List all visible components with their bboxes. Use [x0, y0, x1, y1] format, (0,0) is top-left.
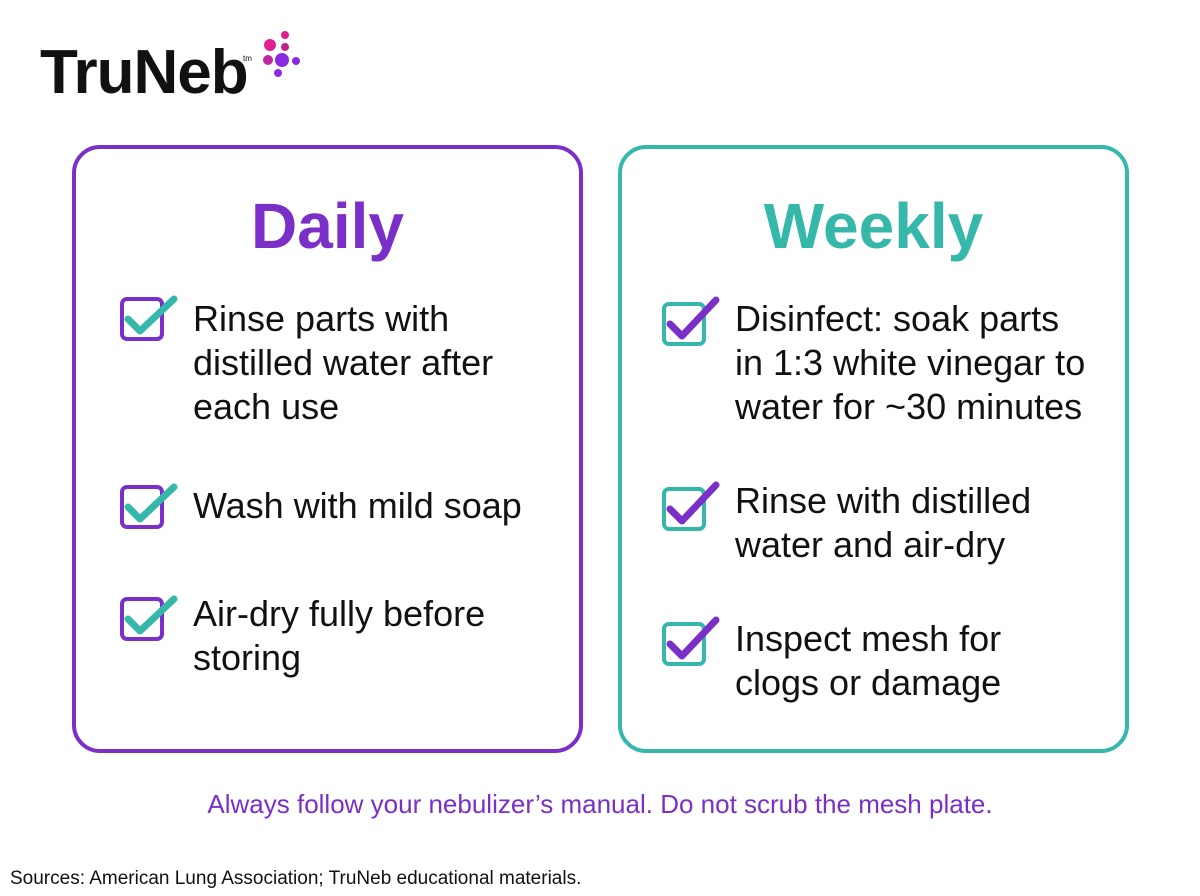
text: Disinfect: soak parts	[735, 298, 1059, 339]
icon: checkbox	[120, 296, 178, 341]
text: clogs or damage	[735, 662, 1001, 703]
logo: tm	[243, 54, 252, 63]
text: Wash with mild soap	[193, 485, 522, 526]
heading: Daily: Daily	[251, 190, 404, 262]
icon: checkbox	[662, 296, 720, 346]
text: water and air-dry	[735, 524, 1005, 565]
text: Rinse parts with	[193, 298, 449, 339]
text: each use	[193, 386, 339, 427]
panel: weekly	[618, 145, 1129, 753]
text: Rinse with distilled	[735, 480, 1031, 521]
heading: Weekly: Weekly	[764, 190, 983, 262]
sources: Sources: American Lung Association; TruNeb educational materials.	[10, 868, 581, 889]
text: Inspect mesh for	[735, 618, 1001, 659]
text	[735, 618, 1001, 703]
text	[735, 480, 1031, 565]
text	[193, 298, 493, 427]
icon: checkbox	[120, 596, 178, 641]
text: water for ~30 minutes	[735, 386, 1082, 427]
logo: TruNeb	[40, 38, 248, 107]
icon: checkbox	[662, 482, 720, 531]
text	[735, 298, 1085, 427]
text	[193, 593, 485, 678]
panel: daily	[72, 145, 583, 753]
note: Always follow your nebulizer’s manual. Do not scrub the mesh plate.	[207, 789, 993, 819]
icon: checkbox	[120, 484, 178, 529]
text: in 1:3 white vinegar to	[735, 342, 1085, 383]
text: distilled water after	[193, 342, 493, 383]
text: storing	[193, 637, 301, 678]
text: Air-dry fully before	[193, 593, 485, 634]
icon: checkbox	[662, 616, 720, 666]
